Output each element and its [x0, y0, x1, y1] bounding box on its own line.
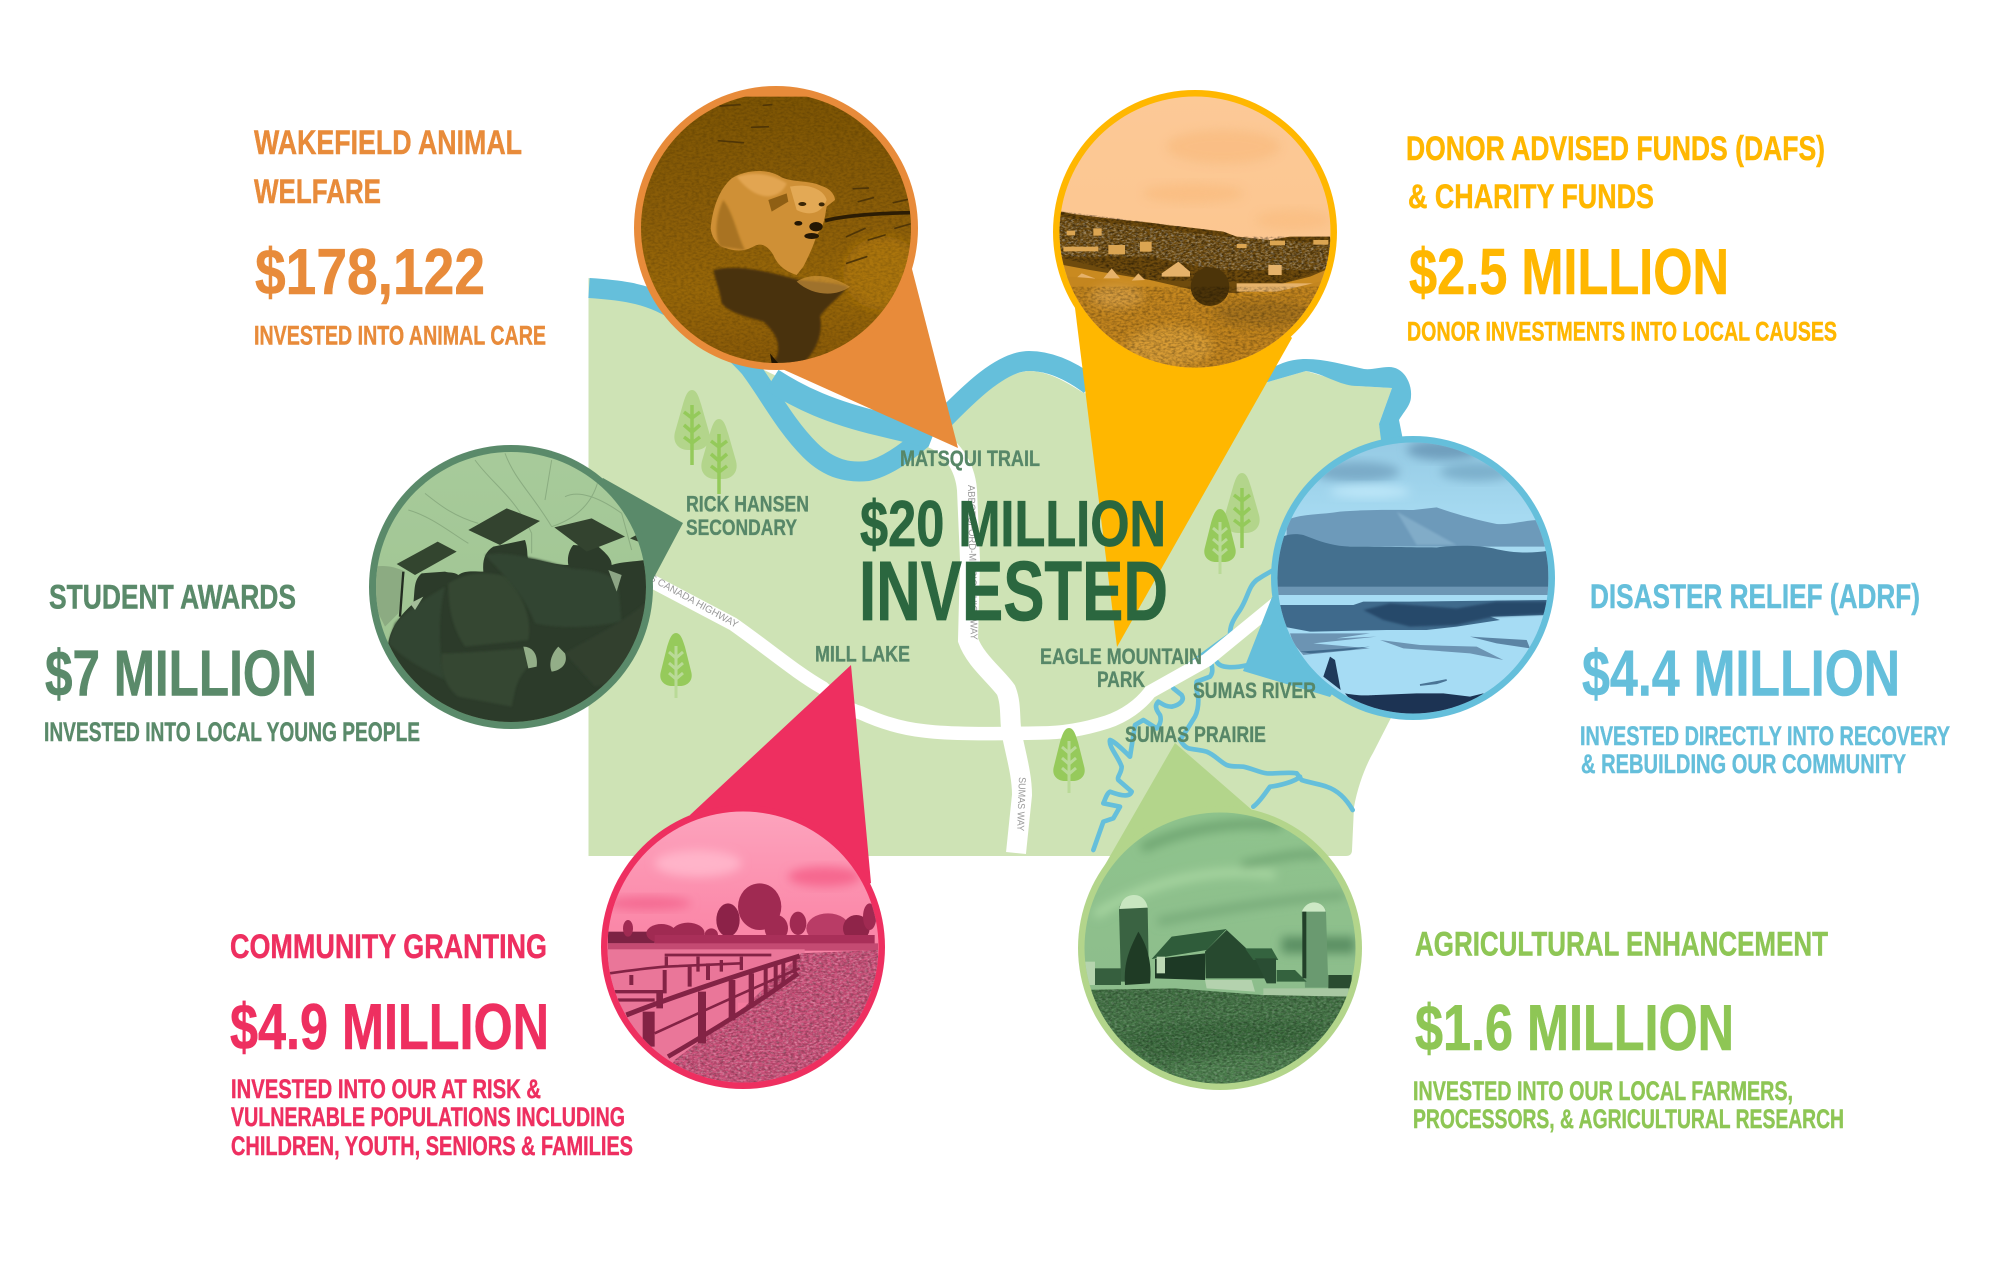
trees — [660, 390, 1260, 793]
description: INVESTED INTO OUR AT RISK & — [231, 1074, 541, 1104]
map place labels: PARK — [1097, 667, 1146, 692]
road name: Trans Canada Highway: TRANS CANADA HIGHWAY — [623, 559, 740, 631]
amount: $4.4 MILLION — [1582, 636, 1900, 710]
heading: AGRICULTURAL ENHANCEMENT — [1415, 926, 1828, 964]
map place labels: EAGLE MOUNTAIN — [1040, 644, 1202, 669]
panel: Disaster Relief — [1243, 430, 1950, 779]
map place labels: SECONDARY — [686, 515, 797, 540]
photo: barn and silos — [1075, 805, 1365, 1095]
Fraser River — [589, 288, 1090, 472]
title: $20 million invested — [859, 487, 1168, 638]
amount: $7 MILLION — [45, 636, 317, 710]
amount: $2.5 MILLION — [1409, 235, 1729, 308]
heading: & CHARITY FUNDS — [1408, 178, 1654, 216]
heading — [1406, 130, 1825, 216]
heading: STUDENT AWARDS — [49, 578, 296, 616]
title: $20 million invested: $20 MILLION — [860, 487, 1166, 560]
white road strip north of the oxbow — [775, 366, 932, 434]
pointer: pink — [690, 665, 871, 947]
map place labels: MILL LAKE — [815, 642, 910, 666]
title: $20 million invested: INVESTED — [859, 544, 1168, 638]
description: & REBUILDING OUR COMMUNITY — [1581, 749, 1906, 779]
panel: Student Awards — [44, 440, 683, 747]
photo: dog in water — [634, 86, 923, 373]
pointer: green — [511, 478, 683, 587]
description: CHILDREN, YOUTH, SENIORS & FAMILIES — [231, 1131, 633, 1161]
heading: COMMUNITY GRANTING — [230, 928, 547, 966]
land area — [588, 278, 1400, 856]
map of the Abbotsford region — [588, 278, 1411, 856]
description: INVESTED INTO OUR LOCAL FARMERS, — [1413, 1076, 1793, 1106]
heading: DONOR ADVISED FUNDS (DAFS) — [1406, 130, 1825, 168]
road name: Abbotsford-Mission Highway: ABBOTSFORD-MISSION HIGHWAY — [965, 485, 979, 640]
amount: $1.6 MILLION — [1415, 991, 1734, 1064]
description: VULNERABLE POPULATIONS INCLUDING — [231, 1102, 625, 1132]
panel: Agricultural Enhancement — [1075, 743, 1844, 1134]
map place labels: SUMAS RIVER — [1193, 678, 1316, 703]
pointer: blue — [1243, 578, 1413, 697]
photo: flooded prairie — [1270, 430, 1560, 728]
map place labels: SUMAS PRAIRIE — [1125, 722, 1266, 747]
map place labels: MATSQUI TRAIL — [900, 446, 1040, 471]
amount: $4.9 MILLION — [230, 990, 549, 1063]
photo: graduates — [365, 440, 658, 733]
photo: hillside houses — [1053, 90, 1337, 368]
Sumas River waterways — [1093, 567, 1353, 850]
pointer: light green — [1102, 743, 1252, 948]
photo: Mill Lake boardwalk — [598, 800, 888, 1090]
road name: Sumas Way: SUMAS WAY — [1014, 777, 1027, 832]
description — [231, 1074, 633, 1161]
description: INVESTED INTO ANIMAL CARE — [254, 320, 546, 350]
heading: WELFARE — [254, 173, 381, 211]
Abbotsford-Mission Highway and Sumas Way — [932, 438, 1022, 853]
panel: Donor Advised Funds — [1047, 87, 1837, 647]
description — [1413, 1076, 1844, 1134]
map place labels — [686, 446, 1316, 747]
panel: Community Granting — [230, 665, 888, 1161]
pointer: gold — [1075, 232, 1292, 647]
pointer: orange — [776, 228, 958, 448]
Trans-Canada Highway — [640, 575, 1290, 734]
heading — [254, 124, 522, 211]
description — [1580, 721, 1950, 779]
heading: WAKEFIELD ANIMAL — [254, 124, 522, 162]
amount: $178,122 — [255, 235, 485, 308]
description: DONOR INVESTMENTS INTO LOCAL CAUSES — [1407, 316, 1837, 346]
map place labels: RICK HANSEN — [686, 492, 809, 516]
description: INVESTED INTO LOCAL YOUNG PEOPLE — [44, 717, 420, 747]
panel: Wakefield Animal Welfare — [254, 86, 958, 448]
description: PROCESSORS, & AGRICULTURAL RESEARCH — [1413, 1104, 1844, 1134]
